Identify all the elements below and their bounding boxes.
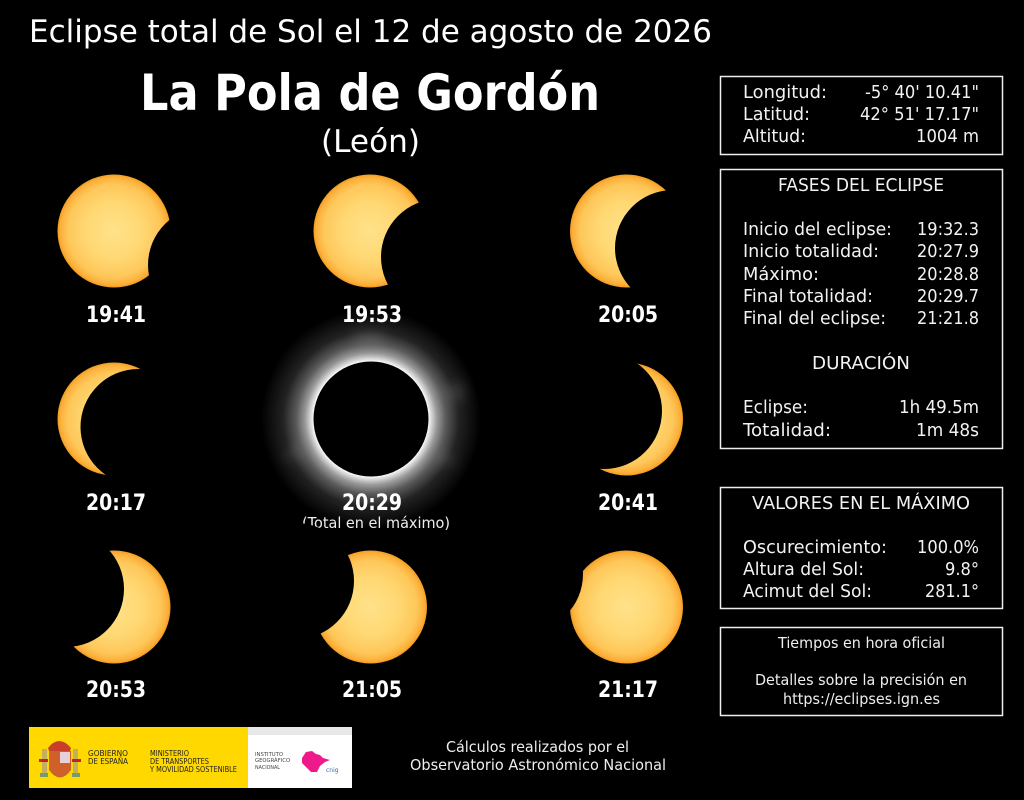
panel: values at maximum: 100.0%	[917, 537, 979, 558]
panel: time notes: https://eclipses.ign.es	[783, 690, 940, 708]
logo text: Instituto Geográfico Nacional	[255, 752, 291, 771]
logo strip	[29, 727, 352, 788]
logo text: Instituto Geográfico Nacional: INSTITUTO	[255, 752, 284, 758]
panel: coordinates: -5° 40' 10.41"	[865, 82, 979, 103]
icon: pink CNIG logo	[302, 751, 339, 774]
panel: values at maximum: 281.1°	[925, 581, 979, 602]
totality time label: 20:29	[342, 491, 402, 516]
panel: values at maximum: 9.8°	[945, 559, 979, 580]
eclipse phase 20:05: 20:05	[598, 303, 658, 328]
panel: coordinates: Altitud:	[743, 126, 806, 147]
logo text: Instituto Geográfico Nacional: GEOGRÁFICO	[255, 757, 291, 764]
icon: pink CNIG logo: cnig	[326, 767, 339, 774]
credit text: Observatorio Astronómico Nacional	[410, 756, 666, 774]
panel: eclipse phases and duration: 20:28.8	[917, 264, 979, 285]
panel: coordinates: Latitud:	[743, 104, 810, 125]
logo text: Ministerio: MINISTERIO	[150, 749, 189, 758]
totality time label	[302, 491, 450, 532]
panel: values at maximum: Altura del Sol:	[743, 559, 864, 580]
eclipse phase 20:05	[570, 174, 731, 328]
logo text: Gobierno de España: DE ESPAÑA	[88, 756, 128, 766]
panel: values at maximum: VALORES EN EL MÁXIMO	[752, 492, 970, 514]
panel: eclipse phases and duration: 21:21.8	[917, 308, 979, 329]
logo text: Ministerio: Y MOVILIDAD SOSTENIBLE	[149, 765, 237, 774]
eclipse totality corona	[261, 309, 481, 529]
panel: time notes: Detalles sobre la precisión en	[755, 671, 967, 689]
title: Eclipse total de Sol el 12 de agosto de 2026	[29, 14, 712, 50]
panel: coordinates	[720, 76, 1002, 154]
panel: values at maximum: Acimut del Sol:	[743, 581, 872, 602]
eclipse phase 21:17: 21:17	[598, 678, 658, 703]
icon: Spanish coat of arms	[39, 741, 81, 778]
logo text: Ministerio: DE TRANSPORTES	[150, 757, 209, 766]
eclipse phase 21:17	[467, 516, 683, 703]
panel: coordinates: Longitud:	[743, 82, 827, 103]
logo text: Gobierno de España: GOBIERNO	[88, 749, 128, 758]
credit text	[410, 738, 666, 774]
province subheading: (León)	[321, 124, 420, 160]
panel: eclipse phases and duration: DURACIÓN	[812, 352, 910, 374]
logo text: Instituto Geográfico Nacional: NACIONAL	[255, 765, 281, 771]
eclipse phase 19:41	[58, 174, 264, 328]
panel: eclipse phases and duration	[720, 170, 1002, 448]
panel: eclipse phases and duration: 20:29.7	[917, 286, 979, 307]
panel: time notes: Tiempos en hora oficial	[777, 634, 945, 652]
eclipse phase 20:53	[8, 531, 170, 703]
eclipse phase 19:53	[314, 174, 497, 328]
panel: eclipse phases and duration: 20:27.9	[917, 241, 979, 262]
eclipse phase 19:53: 19:53	[342, 303, 402, 328]
panel: eclipse phases and duration: Inicio totalidad:	[743, 241, 879, 262]
panel: eclipse phases and duration: Final del eclipse:	[743, 308, 886, 329]
panel: eclipse phases and duration: Máximo:	[743, 264, 819, 285]
panel: eclipse phases and duration: 19:32.3	[917, 219, 979, 240]
eclipse phase 20:53: 20:53	[86, 678, 146, 703]
panel: eclipse phases and duration: Totalidad:	[742, 420, 831, 441]
eclipse phase 21:05	[238, 523, 427, 703]
panel: time notes	[720, 628, 1002, 716]
panel: eclipse phases and duration: 1h 49.5m	[899, 397, 979, 418]
eclipse phase 19:41: 19:41	[86, 303, 146, 328]
eclipse phase 20:41: 20:41	[598, 491, 658, 516]
panel: coordinates: 42° 51' 17.17"	[860, 104, 979, 125]
eclipse phase 20:17: 20:17	[86, 491, 146, 516]
eclipse phase 20:17	[58, 362, 196, 516]
panel: eclipse phases and duration: 1m 48s	[916, 420, 979, 441]
panel: eclipse phases and duration: Eclipse:	[743, 397, 808, 418]
panel: coordinates: 1004 m	[916, 126, 979, 147]
eclipse phase 20:41	[546, 353, 683, 516]
totality time label: (Total en el máximo)	[302, 514, 450, 532]
panel: eclipse phases and duration: Inicio del eclipse:	[743, 219, 892, 240]
location heading: La Pola de Gordón	[140, 64, 600, 122]
panel: values at maximum	[720, 488, 1002, 608]
eclipse phase 21:05: 21:05	[342, 678, 402, 703]
logo text: Gobierno de España	[88, 749, 128, 766]
logo text: Ministerio	[149, 749, 237, 774]
panel: eclipse phases and duration: FASES DEL ECLIPSE	[778, 175, 944, 196]
panel: values at maximum: Oscurecimiento:	[743, 537, 887, 558]
panel: eclipse phases and duration: Final totalidad:	[743, 286, 873, 307]
credit text: Cálculos realizados por el	[446, 738, 629, 756]
